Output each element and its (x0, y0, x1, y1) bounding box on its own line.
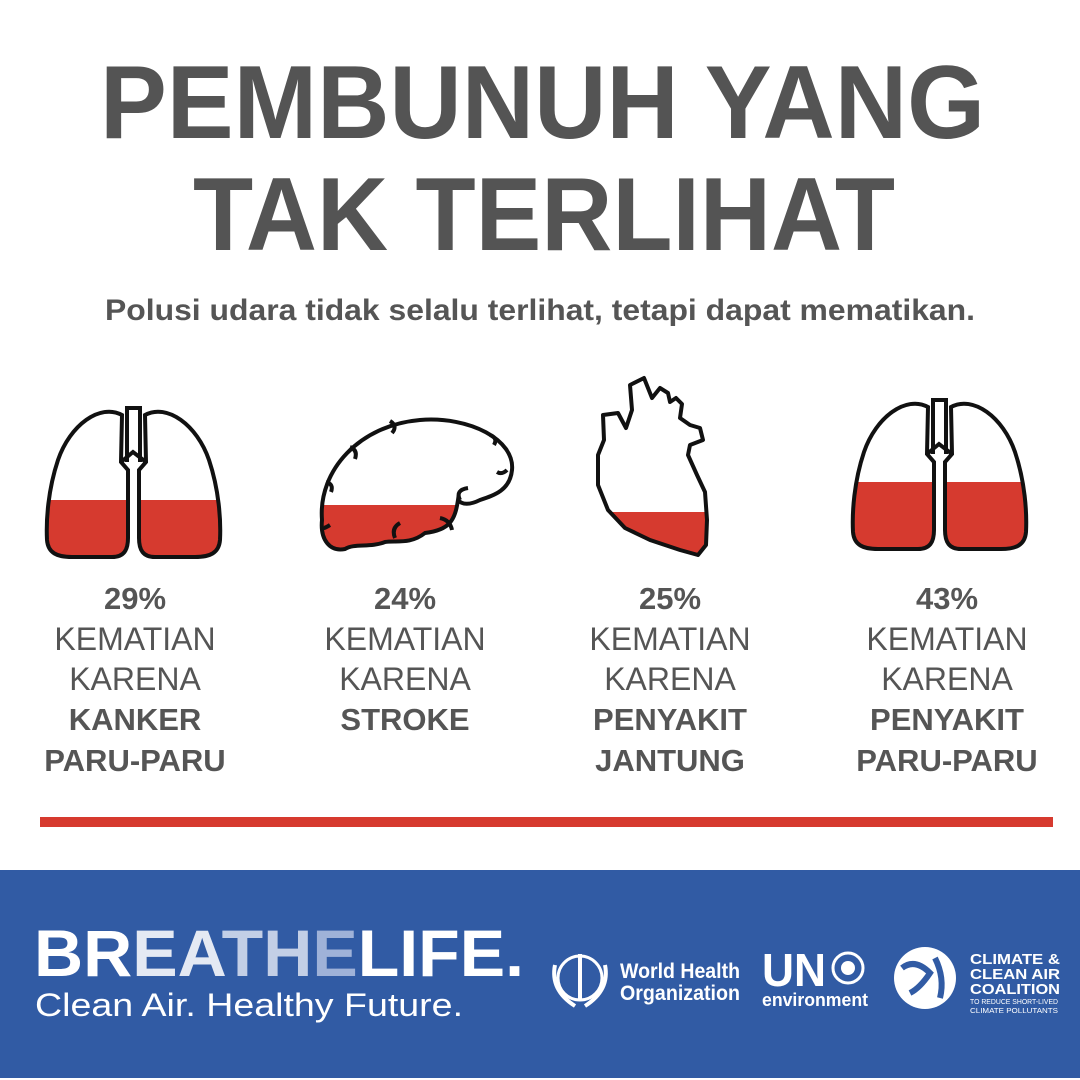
stat: stroke: KARENA (339, 661, 471, 697)
logo: UN environment (762, 944, 868, 1010)
logo: CCAC: COALITION (970, 981, 1060, 998)
logo: UN environment: environment (762, 990, 868, 1010)
logo: WHO (552, 954, 740, 1008)
stat: lung disease (856, 581, 1038, 778)
stat: stroke (324, 581, 486, 737)
subtitle: Polusi udara tidak selalu terlihat, tetapi dapat mematikan. (105, 294, 975, 327)
title: PEMBUNUH YANG (100, 45, 985, 161)
stat: lung cancer: KEMATIAN (54, 621, 216, 657)
red divider (40, 817, 1053, 827)
icon: heart 25% (598, 378, 707, 555)
stat: lung cancer (44, 581, 226, 778)
stat: lung cancer: 29% (104, 581, 166, 616)
stat: stroke: KEMATIAN (324, 621, 486, 657)
stat: stroke: 24% (374, 581, 436, 616)
icon: lungs 29% (47, 408, 220, 557)
stat: lung disease: PARU-PARU (856, 743, 1038, 778)
logo: CCAC: CLIMATE & (970, 951, 1060, 968)
stat: lung disease: PENYAKIT (870, 702, 1024, 737)
stat: heart disease (589, 581, 751, 778)
stat: heart disease: JANTUNG (595, 743, 745, 778)
title (100, 45, 985, 270)
logo: CCAC: TO REDUCE SHORT-LIVED (970, 999, 1058, 1006)
title: TAK TERLIHAT (193, 157, 895, 270)
logo: CCAC (894, 947, 1060, 1015)
stat: lung cancer: KANKER (69, 702, 201, 737)
stat: stroke: STROKE (340, 702, 470, 737)
stat: heart disease: KEMATIAN (589, 621, 751, 657)
stat: lung disease: KEMATIAN (866, 621, 1028, 657)
stat: heart disease: 25% (639, 581, 701, 616)
logo: CCAC: CLIMATE POLLUTANTS (970, 1008, 1058, 1015)
logo: CCAC: CLEAN AIR (970, 966, 1060, 983)
stat: lung disease: KARENA (881, 661, 1013, 697)
icons (44, 376, 1028, 559)
logo: breathelife: BREATHELIFE. (34, 916, 524, 990)
logo: UN environment: UN (762, 944, 826, 996)
logo: breathelife: Clean Air. Healthy Future. (35, 987, 463, 1023)
icon: lungs 43% (853, 400, 1026, 549)
stat: heart disease: PENYAKIT (593, 702, 747, 737)
logo: WHO: Organization (620, 982, 740, 1005)
icon: brain 24% (322, 420, 512, 549)
stat: lung disease: 43% (916, 581, 978, 616)
stat: heart disease: KARENA (604, 661, 736, 697)
footer (0, 870, 1080, 1078)
logo: breathelife (34, 916, 524, 1023)
stat: lung cancer: PARU-PARU (44, 743, 226, 778)
stat: lung cancer: KARENA (69, 661, 201, 697)
